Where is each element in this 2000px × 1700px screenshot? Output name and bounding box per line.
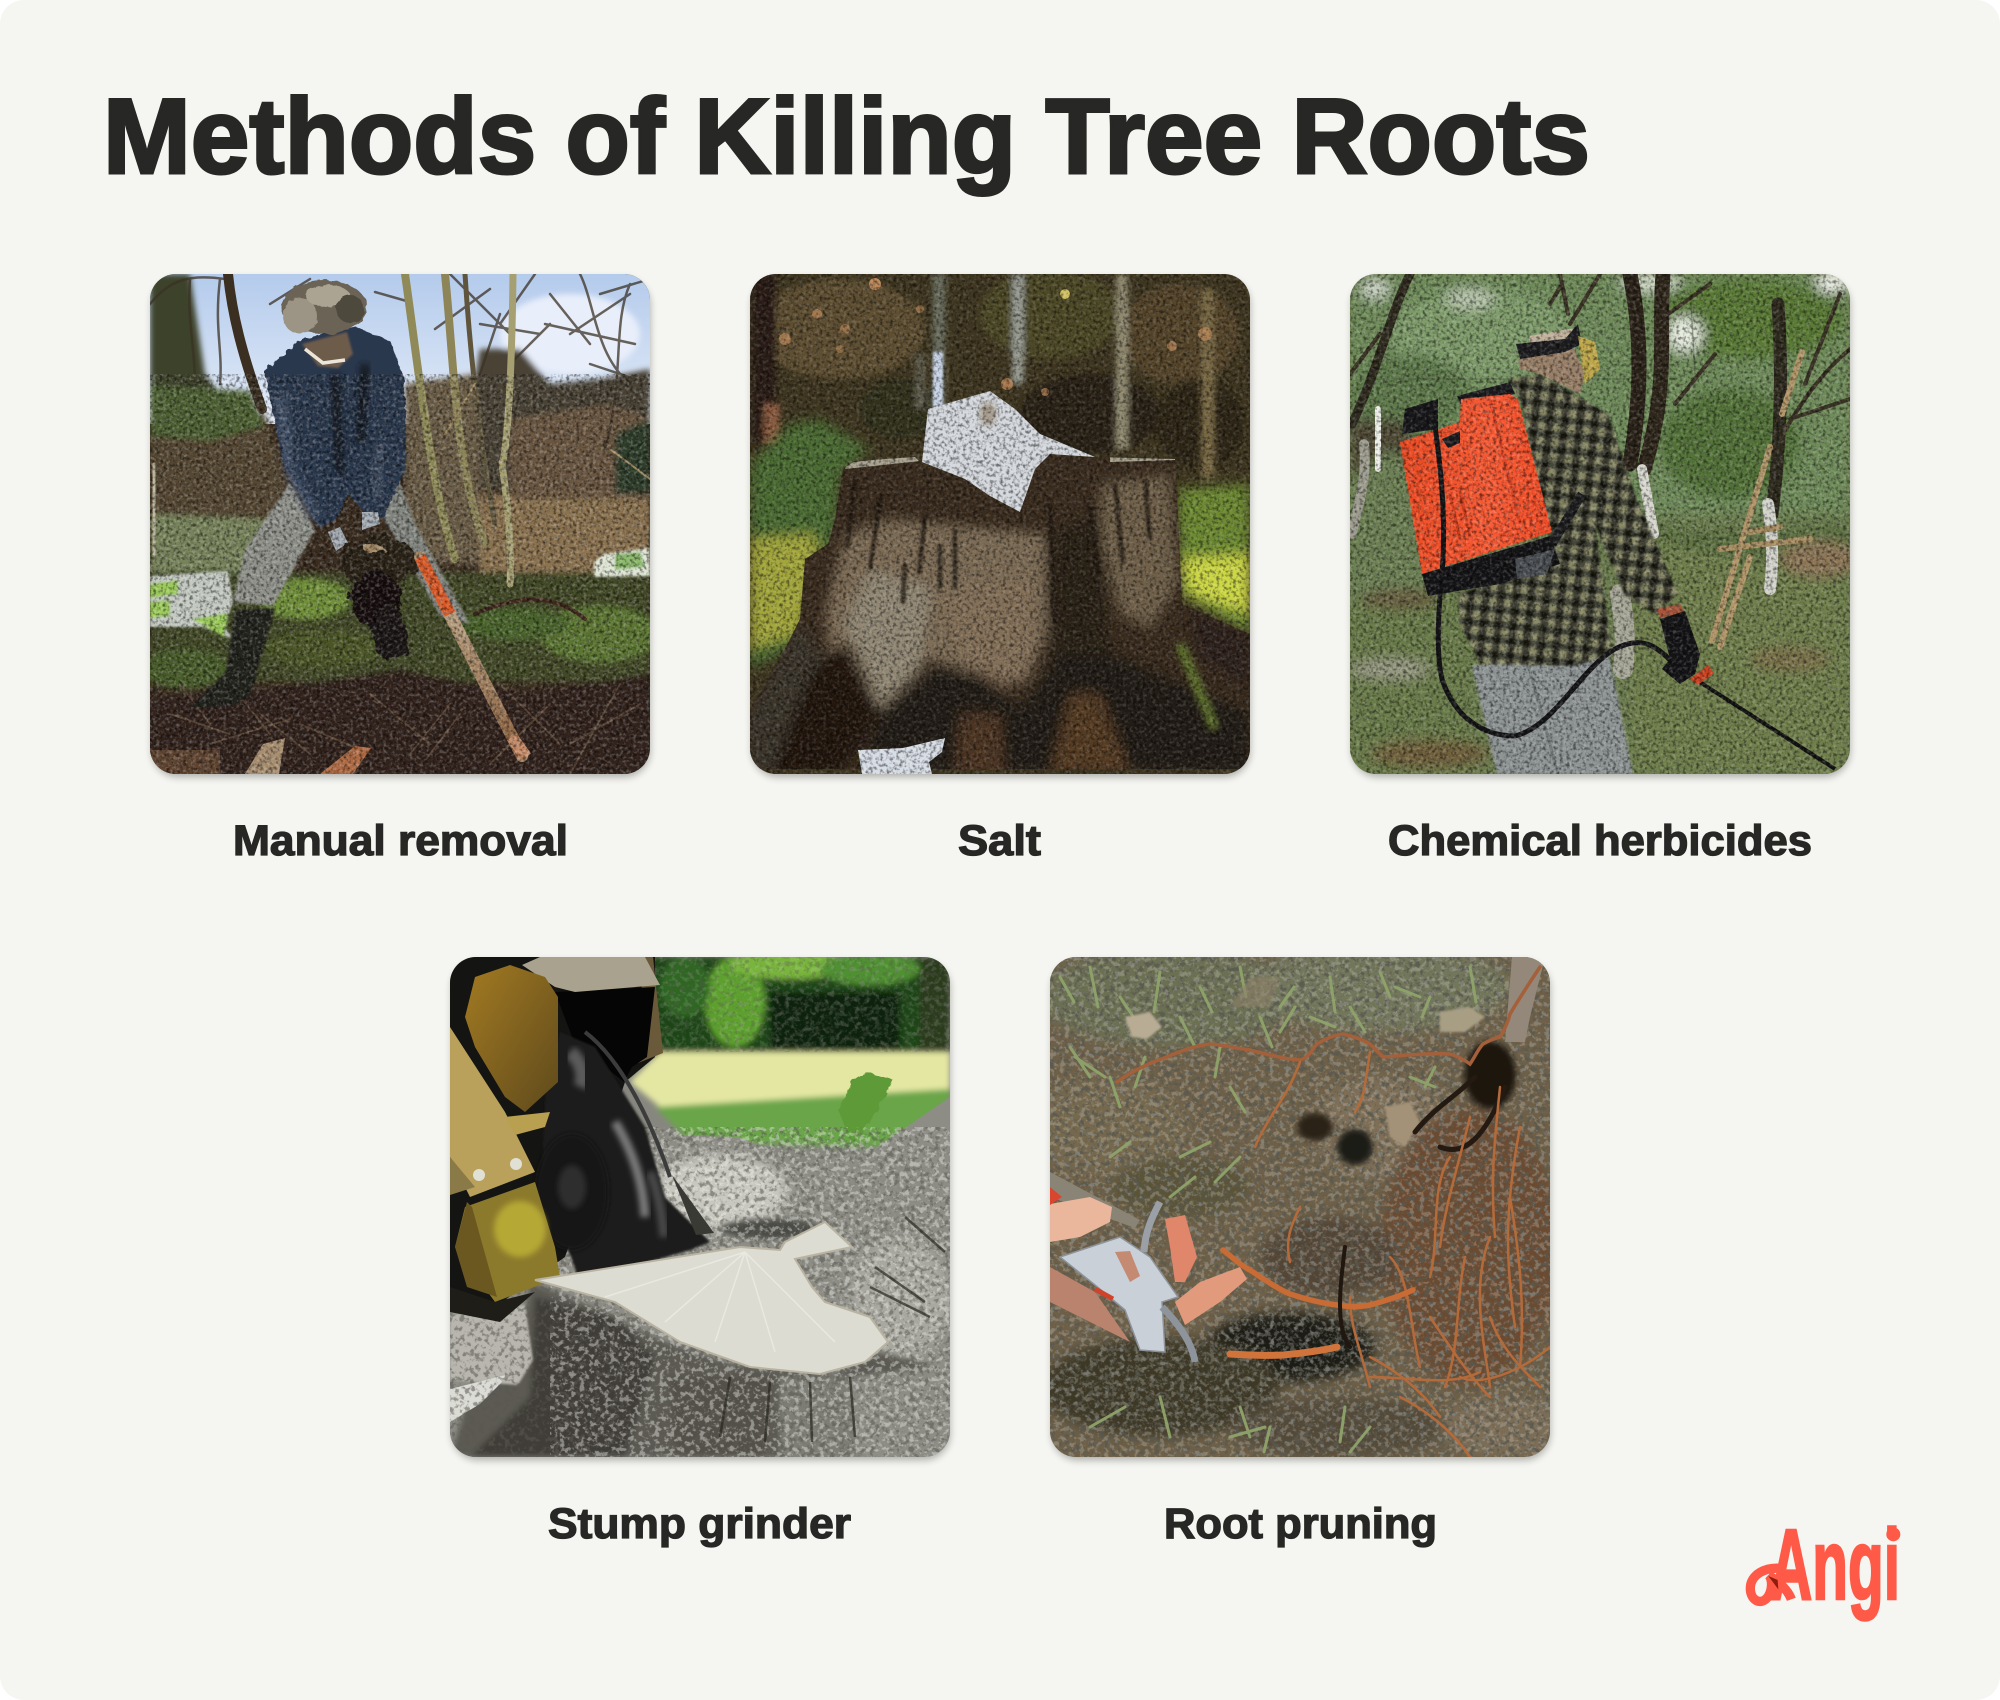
panel: stump grinder [450,951,950,1460]
title: Methods of Killing Tree Roots [103,76,1590,196]
wood planks [150,738,371,774]
logo: Angi: Angi [1770,1509,1900,1621]
background forest and lawn [630,951,950,1147]
roots [1117,967,1550,1457]
photo: tree stump topped with salt [750,269,1250,774]
label: manual removal: Manual removal [233,817,568,865]
panel: salt [750,269,1250,777]
label: stump grinder: Stump grinder [548,1500,851,1548]
photo: stump grinder cutting a stump [450,951,950,1457]
label: root pruning: Root pruning [1164,1500,1437,1548]
grass blades [1060,967,1476,1452]
sprayer strap and man [1458,324,1835,774]
hand and pruning shears [1050,1172,1247,1362]
freshly cut stump surface [535,1222,888,1374]
label: chemical herbicides: Chemical herbicides [1388,817,1812,865]
gravel [450,1097,950,1457]
photo: pruning shears cutting exposed roots [1030,942,1580,1457]
photo: man with red backpack sprayer [1350,272,1860,774]
salt pile [922,391,1095,512]
hose [1434,419,1672,736]
fertilizer bags [150,548,650,639]
label: salt: Salt [958,817,1041,865]
bare tree branches [150,274,650,774]
panel: manual removal [140,274,660,777]
red sprayer tank [1400,382,1582,596]
logo: Angi [1750,1509,1900,1621]
man [190,280,470,708]
trees and trunks [1350,274,1850,669]
panel: chemical herbicides [1350,272,1860,777]
tree stem [1505,957,1545,1042]
photo: man pulling roots with a spade [140,274,660,774]
panel: root pruning [1030,942,1580,1460]
grinder machine [450,957,714,1322]
stump [750,454,1250,769]
stump bark [450,1282,950,1457]
spade handle [420,557,522,756]
